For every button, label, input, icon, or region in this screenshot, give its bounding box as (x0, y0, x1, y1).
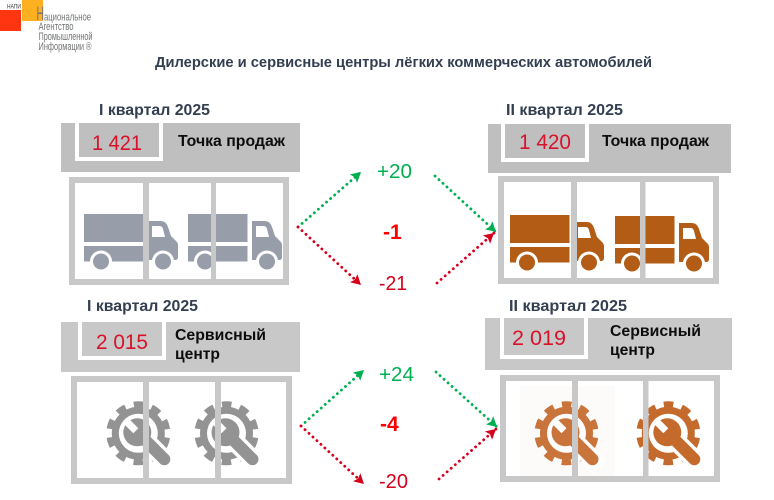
arrows: bottom right (436, 372, 497, 479)
logo: ациональное (44, 12, 91, 24)
title: Дилерские и сервисные центры лёгких коммерческих автомобилей (155, 55, 652, 71)
panel: service centres Q2 (485, 298, 732, 479)
label: service centre: Сервисный (610, 323, 701, 340)
value: 1 421: 1 421 (92, 132, 142, 155)
delta: -4: -4 (380, 413, 399, 436)
panel: sales points Q1 (61, 102, 300, 282)
panel: service centres Q1: центр (175, 346, 220, 363)
logo: Информации ® (38, 41, 92, 53)
delta: -21: -21 (379, 272, 407, 295)
logo (0, 0, 92, 53)
logo: Агентство (38, 21, 74, 33)
icon: orange gear 2 (639, 404, 702, 467)
value: 1 420: 1 420 (519, 131, 571, 154)
logo: НАПИ (7, 4, 21, 10)
delta: -20: -20 (379, 470, 408, 493)
heading: Q2 sales points: II квартал 2025 (506, 102, 623, 119)
heading: Q1 service centres: I квартал 2025 (87, 298, 198, 315)
value: 2 015: 2 015 (96, 331, 148, 354)
icon: orange truck 2 (615, 216, 709, 274)
logo: Промышленной (38, 31, 92, 43)
panel: service centres Q2: центр (610, 342, 655, 359)
icon: grey gear 2 (198, 404, 260, 467)
logo: Н (36, 4, 44, 25)
icon: orange gear 1 (538, 404, 600, 467)
delta: +20: +20 (377, 160, 412, 183)
label: sales point: Точка продаж (602, 133, 710, 150)
delta: -1: -1 (383, 221, 402, 244)
arrows: bottom left (301, 370, 364, 484)
icon: grey truck 1 (84, 214, 178, 272)
delta: +24: +24 (379, 363, 414, 386)
panel: sales points Q2 (488, 102, 731, 281)
icon: grey gear 1 (109, 404, 172, 467)
panel: service centres Q1 (61, 298, 300, 481)
label: sales point: Точка продаж (178, 133, 286, 150)
value: 2 019: 2 019 (512, 327, 566, 350)
heading: Q2 service centres: II квартал 2025 (509, 298, 627, 315)
arrows: top right (435, 176, 496, 283)
icon: orange truck 1 (510, 215, 604, 274)
icon: grey truck 2 (188, 214, 282, 272)
arrows: top left (298, 172, 361, 285)
heading: Q1 sales points: I квартал 2025 (99, 102, 210, 119)
label: service centre: Сервисный (175, 327, 266, 344)
